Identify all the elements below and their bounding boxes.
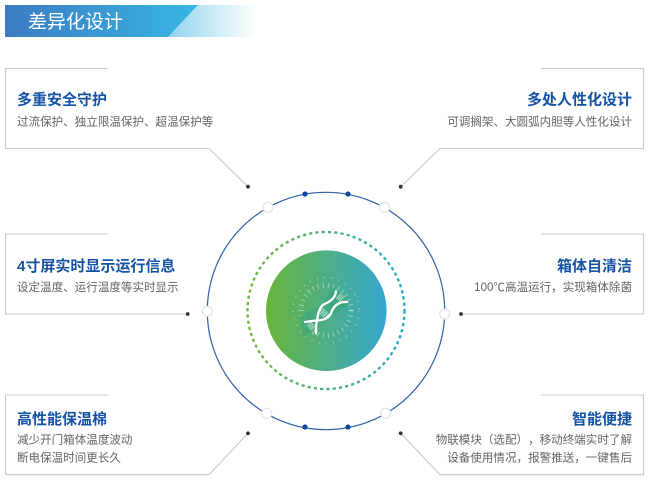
panel: humanized design: 多处人性化设计	[527, 90, 632, 108]
panel: 4-inch screen: 设定温度、运行温度等实时显示	[17, 280, 179, 294]
icon: DNA	[293, 278, 359, 344]
panel: smart and convenient: 设备使用情况，报警推送，一键售后	[447, 450, 632, 464]
central circle diagram	[202, 191, 450, 430]
panel: humanized design: 可调搁架、大圆弧内胆等人性化设计	[447, 115, 632, 129]
panel: self-cleaning chamber	[459, 234, 644, 316]
panel: high performance insulation: 断电保温时间更长久	[17, 450, 121, 464]
panel: smart and convenient: 物联模块（选配），移动终端实时了解	[436, 432, 632, 446]
ring nodes	[202, 191, 450, 430]
panel: multiple safety protection: 多重安全守护	[17, 90, 107, 108]
panel: high performance insulation	[6, 395, 250, 475]
panel: smart and convenient	[399, 395, 644, 475]
header banner	[5, 5, 256, 37]
panel: high performance insulation: 高性能保温棉	[17, 410, 107, 428]
gradient disc	[266, 250, 387, 371]
outer ring	[207, 192, 445, 430]
header title: 差异化设计	[28, 11, 123, 33]
panel: humanized design	[399, 68, 644, 189]
panel: self-cleaning chamber: 100℃高温运行，实现箱体除菌	[474, 280, 632, 294]
panel: multiple safety protection: 过流保护、独立限温保护、超温保护等	[17, 115, 214, 129]
panel: 4-inch screen: 4寸屏实时显示运行信息	[17, 257, 175, 275]
panel: 4-inch screen	[6, 234, 190, 316]
dashed ring	[248, 232, 404, 389]
panel: high performance insulation: 减少开门箱体温度波动	[17, 432, 132, 446]
panel: smart and convenient: 智能便捷	[572, 410, 632, 428]
panel: self-cleaning chamber: 箱体自清洁	[557, 257, 632, 275]
panel: multiple safety protection	[6, 68, 250, 189]
